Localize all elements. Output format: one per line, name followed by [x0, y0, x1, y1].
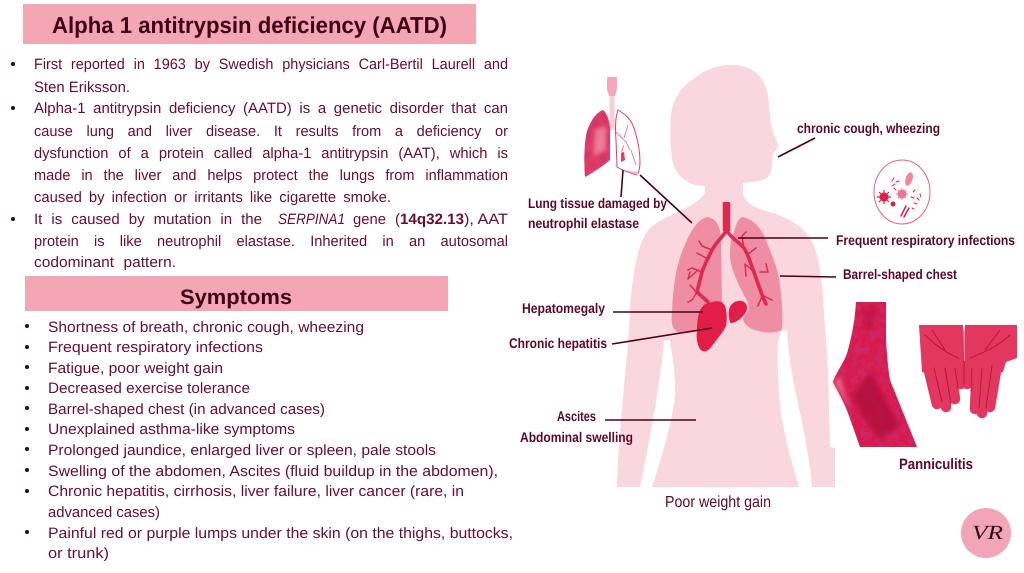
icon: small damaged lungs [584, 77, 640, 177]
label: poor weight gain: Poor weight gain [665, 494, 771, 511]
symptoms list: Fatigue, poor weight gain [48, 360, 223, 377]
arrow: respiratory infections to lung [738, 237, 828, 239]
arrow: cough to throat [778, 138, 815, 157]
heading: symptoms [25, 276, 448, 311]
label: ascites and abdominal swelling: Abdominal swelling [520, 429, 633, 445]
symptoms list: Frequent respiratory infections [48, 339, 263, 356]
bullet: first report [11, 56, 508, 96]
heading: symptoms: Symptoms [180, 286, 292, 309]
label: hepatomegaly: Hepatomegaly [522, 300, 605, 316]
arrow: chronic hepatitis to liver [612, 328, 712, 344]
bullet: definition: Alpha-1 antitrypsin deficiency (AATD) is a genetic disorder that can [34, 100, 508, 117]
bullet: genetic cause: SERPINA1 [278, 211, 345, 228]
bullet: genetic cause: gene [353, 211, 386, 228]
label: chronic cough: chronic cough, wheezing [797, 120, 940, 136]
symptoms list: Chronic hepatitis, cirrhosis, liver failure, liver cancer (rare, in [48, 483, 464, 500]
arrow: ascites to abdomen [605, 419, 696, 421]
bullet: first report: First reported in 1963 by Swedish physicians Carl-Bertil Laurell and [34, 56, 508, 73]
bullet: genetic cause: protein is like neutrophil elastase. Inherited in an autosomal [34, 233, 508, 250]
symptoms list: Unexplained asthma-like symptoms [48, 421, 295, 438]
bullet: definition: dysfunction of a protein called alpha-1 antitrypsin (AAT), which is [34, 145, 508, 162]
symptoms list: Decreased exercise tolerance [48, 380, 250, 397]
logo: VR badge: VR [972, 522, 1003, 544]
arrow: barrel chest [780, 276, 836, 277]
bullet: genetic cause: It is caused by mutation in the [34, 211, 262, 228]
symptoms list [25, 319, 513, 562]
title banner: Alpha 1 antitrypsin deficiency (AATD) [52, 12, 447, 38]
icon: pathogen circle [874, 160, 930, 224]
label: lung tissue damaged: neutrophil elastase [528, 215, 639, 231]
bullet: genetic cause [11, 211, 508, 271]
bullet: definition: caused by infection or irritants like cigarette smoke. [34, 189, 391, 206]
label: lung tissue damaged: Lung tissue damaged by [528, 195, 667, 211]
left lung [672, 217, 722, 333]
arrow: lung tissue to small lung [621, 170, 623, 197]
bullet: genetic cause: ), AAT [464, 211, 508, 228]
label: ascites and abdominal swelling: Ascites [557, 408, 596, 424]
body silhouette [617, 65, 835, 487]
symptoms list: Prolonged jaundice, enlarged liver or spleen, pale stools [48, 442, 436, 459]
icon: panniculitis hands photo [919, 325, 1017, 413]
trachea and bronchi [688, 202, 772, 306]
arrow: hepatomegaly to liver [613, 311, 703, 313]
symptoms list: Shortness of breath, chronic cough, wheezing [48, 319, 364, 336]
symptoms list: Barrel-shaped chest (in advanced cases) [48, 401, 325, 418]
logo: VR badge [961, 508, 1011, 558]
label: panniculitis: Panniculitis [899, 456, 973, 473]
symptoms list: Painful red or purple lumps under the skin (on the thighs, buttocks, [48, 525, 513, 542]
arrow: lung tissue to chest [640, 175, 692, 223]
bullet: genetic cause: ( [395, 211, 400, 228]
bullet: genetic cause: 14q32.13 [400, 211, 464, 228]
pointer lines [605, 138, 836, 420]
label: barrel-shaped chest: Barrel-shaped chest [843, 266, 957, 282]
bullet: definition: made in the liver and helps protect the lungs from inflammation [34, 167, 508, 184]
icon: panniculitis leg photo [833, 302, 917, 447]
label: ascites and abdominal swelling [520, 408, 633, 445]
symptoms list: advanced cases) [48, 504, 160, 521]
label: chronic hepatitis: Chronic hepatitis [509, 335, 607, 351]
symptoms list: or trunk) [48, 545, 109, 562]
text block: overview bullets [11, 56, 508, 271]
right lung [730, 217, 782, 333]
symptoms list: Swelling of the abdomen, Ascites (fluid buildup in the abdomen), [48, 463, 498, 480]
bullet: genetic cause: codominant pattern. [34, 254, 176, 271]
bullet: definition [11, 100, 508, 206]
title banner [23, 4, 476, 44]
label: lung tissue damaged [528, 195, 667, 231]
liver [697, 301, 747, 351]
bullet: definition: cause lung and liver disease. It results from a deficiency or [34, 123, 508, 140]
bullet: first report: Sten Eriksson. [34, 79, 130, 96]
lungs in body [672, 202, 782, 333]
